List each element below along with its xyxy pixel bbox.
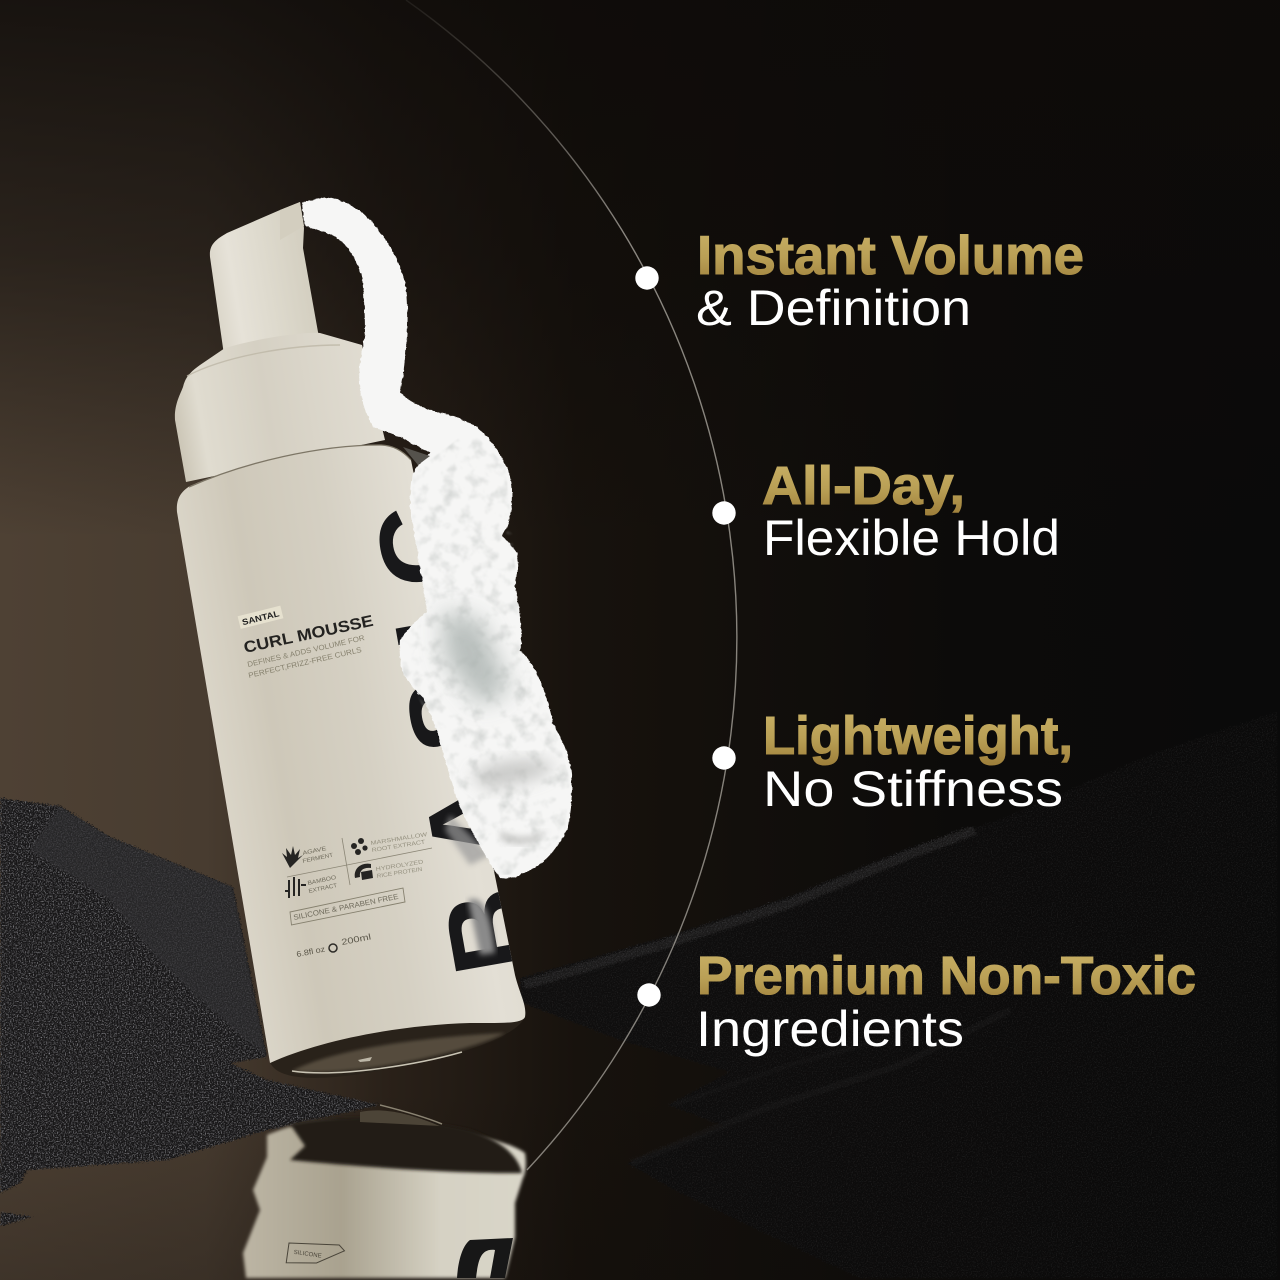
foam: bubble texture xyxy=(402,430,570,875)
label: description xyxy=(246,633,366,680)
label: ingredient names xyxy=(302,832,428,895)
feature 3 xyxy=(712,706,1073,817)
label: volume: 6.8fl oz xyxy=(296,945,326,959)
label: ingredient names: HYDROLYZED xyxy=(375,860,424,873)
reflection: mirrored label xyxy=(286,1238,345,1271)
feature 2 xyxy=(712,456,1060,566)
subheading: No Stiffness xyxy=(763,761,1063,817)
bullet dot xyxy=(635,266,659,290)
label: volume xyxy=(296,931,372,959)
sand: left mound xyxy=(0,798,380,1226)
bullet dot xyxy=(712,501,736,525)
seam line xyxy=(189,445,411,487)
label: ingredient names: EXTRACT xyxy=(308,883,338,895)
label: ingredient grid xyxy=(282,832,432,898)
label: free-from badge: SILICONE & PARABEN FREE xyxy=(293,892,399,922)
foam xyxy=(302,197,572,878)
body xyxy=(177,445,525,1063)
reflection: mirrored label: SILICONE xyxy=(293,1250,322,1260)
bottle base xyxy=(270,1017,525,1078)
label: volume: 200ml xyxy=(340,931,372,947)
heading: Lightweight, xyxy=(763,706,1073,766)
bullet dot xyxy=(712,746,736,770)
product bottle xyxy=(175,202,561,1078)
arc connector line xyxy=(406,0,737,1170)
subheading: & Definition xyxy=(696,280,971,336)
neck collar xyxy=(175,333,385,482)
feature 1 xyxy=(635,224,1084,336)
label: product name xyxy=(238,606,375,680)
heading: All-Day, xyxy=(762,456,965,516)
reflection: dark lettering xyxy=(457,1238,513,1278)
foam: shadow gap xyxy=(403,447,430,465)
brand lettering: BASIC xyxy=(350,492,561,983)
label: ingredient names: BAMBOO xyxy=(307,875,337,887)
heading: Premium Non-Toxic xyxy=(697,946,1196,1006)
subheading: Flexible Hold xyxy=(763,510,1060,566)
subheading: Ingredients xyxy=(696,1001,964,1057)
brand lettering xyxy=(380,510,512,972)
label: ingredient names: RICE PROTEIN xyxy=(376,867,423,880)
label: description: DEFINES & ADDS VOLUME FOR xyxy=(246,633,366,669)
icon: bamboo xyxy=(285,877,306,898)
label: title: CURL MOUSSE xyxy=(242,613,375,657)
cap xyxy=(210,202,322,362)
foam: shading xyxy=(442,610,555,845)
label: ingredient names: ROOT EXTRACT xyxy=(371,840,426,854)
label: description: PERFECT,FRIZZ-FREE CURLS xyxy=(247,645,362,680)
feature 4 xyxy=(637,946,1196,1057)
label: ingredient names: AGAVE xyxy=(302,846,327,857)
heading: Instant Volume xyxy=(697,224,1084,286)
label: free-from badge xyxy=(290,888,405,925)
label: scent tag: SANTAL xyxy=(241,608,280,627)
sand: right dune xyxy=(520,712,1278,1278)
foam: silhouette xyxy=(302,197,572,878)
bottle reflection xyxy=(243,1105,526,1278)
label: ingredient names: FERMENT xyxy=(302,853,334,865)
label: ingredient names: MARSHMALLOW xyxy=(370,832,428,847)
bullet dot xyxy=(637,983,661,1007)
icon: rice protein xyxy=(355,864,373,880)
icon: agave xyxy=(282,846,303,868)
icon: marshmallow xyxy=(351,838,368,855)
